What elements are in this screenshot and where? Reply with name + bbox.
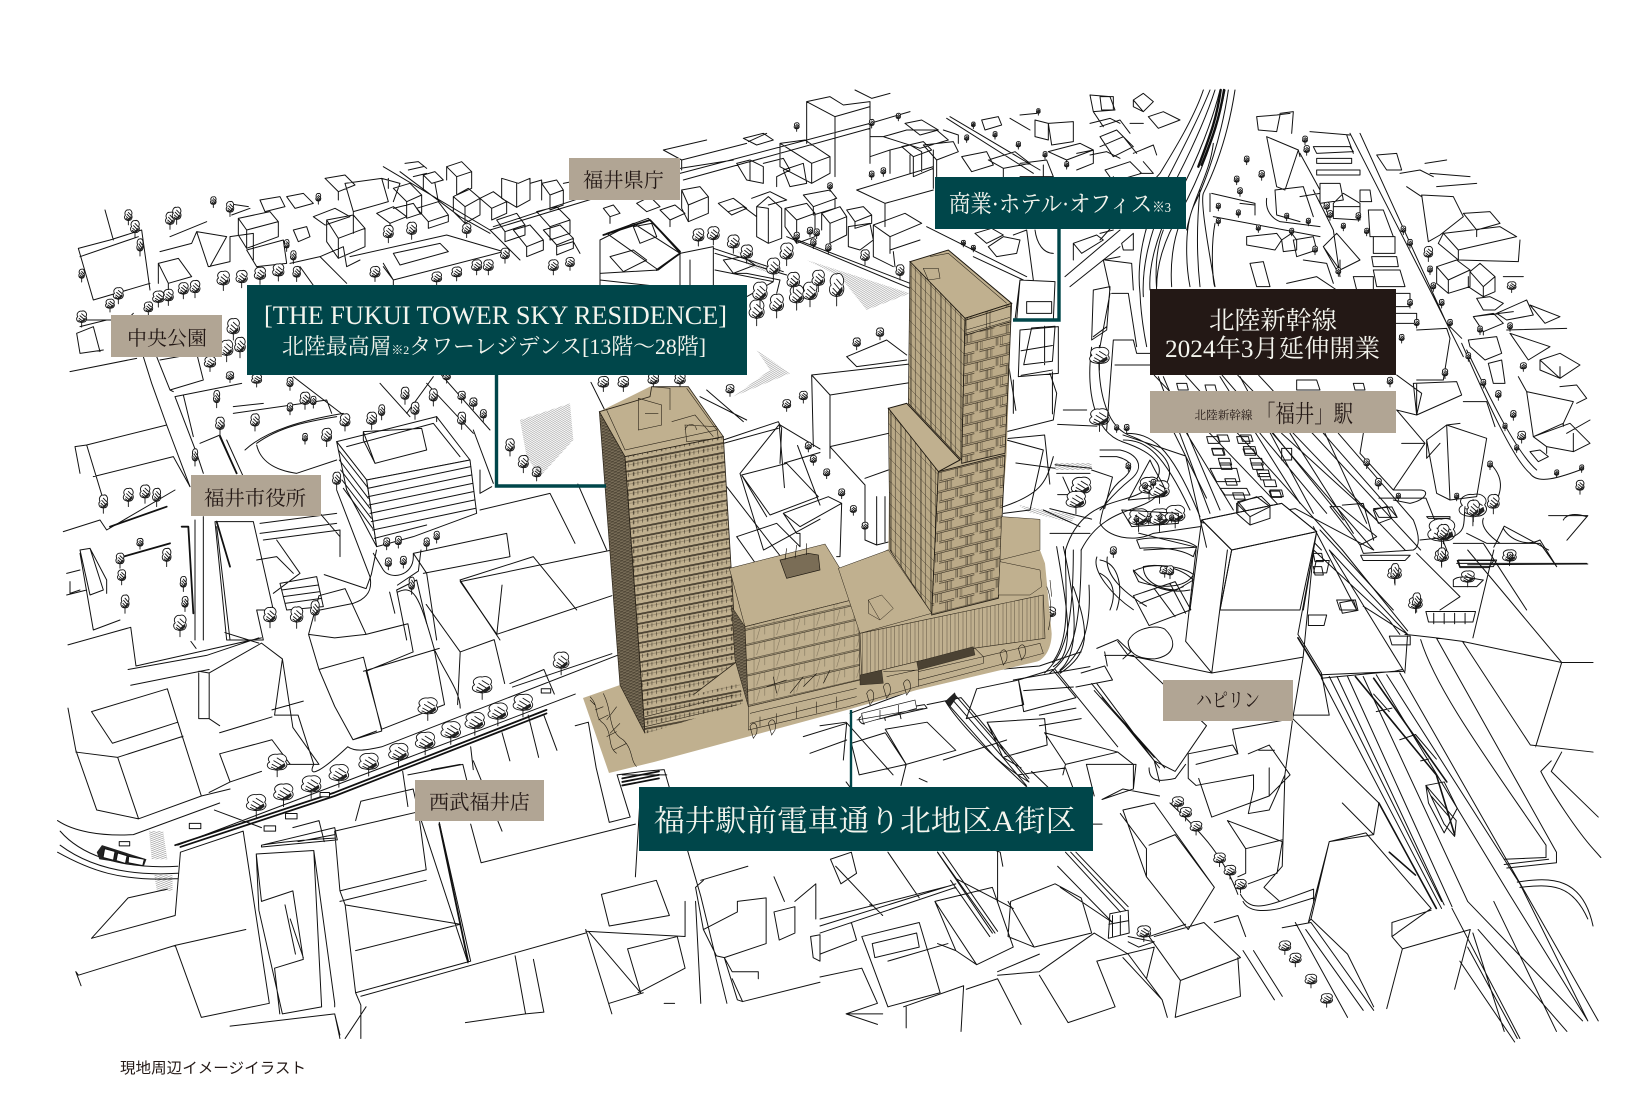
tag: Happiring: ハピリン <box>1196 690 1260 712</box>
illustration: central city line drawing <box>578 382 820 550</box>
tag: Seibu Fukui store <box>415 780 544 821</box>
illustration: railway and city line drawing, middle right <box>1008 326 1588 550</box>
tag: Seibu Fukui store: 西武福井店 <box>429 791 530 814</box>
panel: Hokuriku Shinkansen opening <box>1150 289 1396 375</box>
tag: Central Park <box>111 315 222 357</box>
panel: Hokuriku Shinkansen opening: 北陸新幹線 <box>1209 307 1337 335</box>
panel: The Fukui Tower Sky Residence: [THE FUKUI TOWER SKY RESIDENCE] <box>264 301 727 330</box>
tram on street <box>857 700 923 723</box>
leader line: commercial tower <box>1013 229 1059 320</box>
panel: Hokuriku Shinkansen opening: 2024年3月延伸開業 <box>1165 335 1380 363</box>
illustration: blocks and station tracks line drawing, bottom right <box>820 550 1601 1042</box>
right office and hotel tower <box>888 250 1012 615</box>
panel: commercial, hotel, office <box>935 177 1186 229</box>
left residential tower <box>599 387 743 733</box>
illustration: railway and right city quarter line drawing <box>1100 90 1590 612</box>
leader line: residence tower <box>496 375 606 486</box>
panel: district name: 福井駅前電車通り北地区A街区 <box>654 805 1076 838</box>
panel: commercial, hotel, office: 商業·ホテル·オフィス※3 <box>949 191 1171 218</box>
caption: 現地周辺イメージイラスト <box>120 1060 306 1077</box>
tag: Central Park: 中央公園 <box>127 327 207 350</box>
commercial podium <box>748 517 1045 730</box>
illustration: left city quarter line drawing <box>63 162 600 640</box>
tag: Happiring <box>1163 680 1293 721</box>
panel: district name <box>639 787 1093 851</box>
mid-rise building <box>729 543 860 707</box>
panel: The Fukui Tower Sky Residence: 北陸最高層※2タワーレジデンス[13階〜28階] <box>282 334 706 359</box>
development base silhouette <box>583 250 1052 773</box>
tag: Fukui Prefectural Office: 福井県庁 <box>583 169 664 192</box>
illustration: streets and large buildings line drawing, bottom left <box>58 550 820 1038</box>
panel: Fukui station <box>1150 391 1396 433</box>
tag: Fukui Prefectural Office <box>569 158 680 200</box>
street trees on the site <box>590 580 1052 767</box>
illustration: white buildings around the development <box>598 327 1090 760</box>
leader line: district <box>850 710 852 787</box>
tag: Fukui City Hall: 福井市役所 <box>204 487 306 510</box>
panel: Fukui station: 北陸新幹線 <box>1194 408 1253 422</box>
illustration: upper middle city quarter line drawing <box>600 90 1120 340</box>
development site: highlighted towers and podium <box>583 250 1052 773</box>
tag: Fukui City Hall <box>191 475 321 516</box>
panel: The Fukui Tower Sky Residence <box>247 285 747 375</box>
panel: Fukui station: 「福井」駅 <box>1256 401 1353 428</box>
